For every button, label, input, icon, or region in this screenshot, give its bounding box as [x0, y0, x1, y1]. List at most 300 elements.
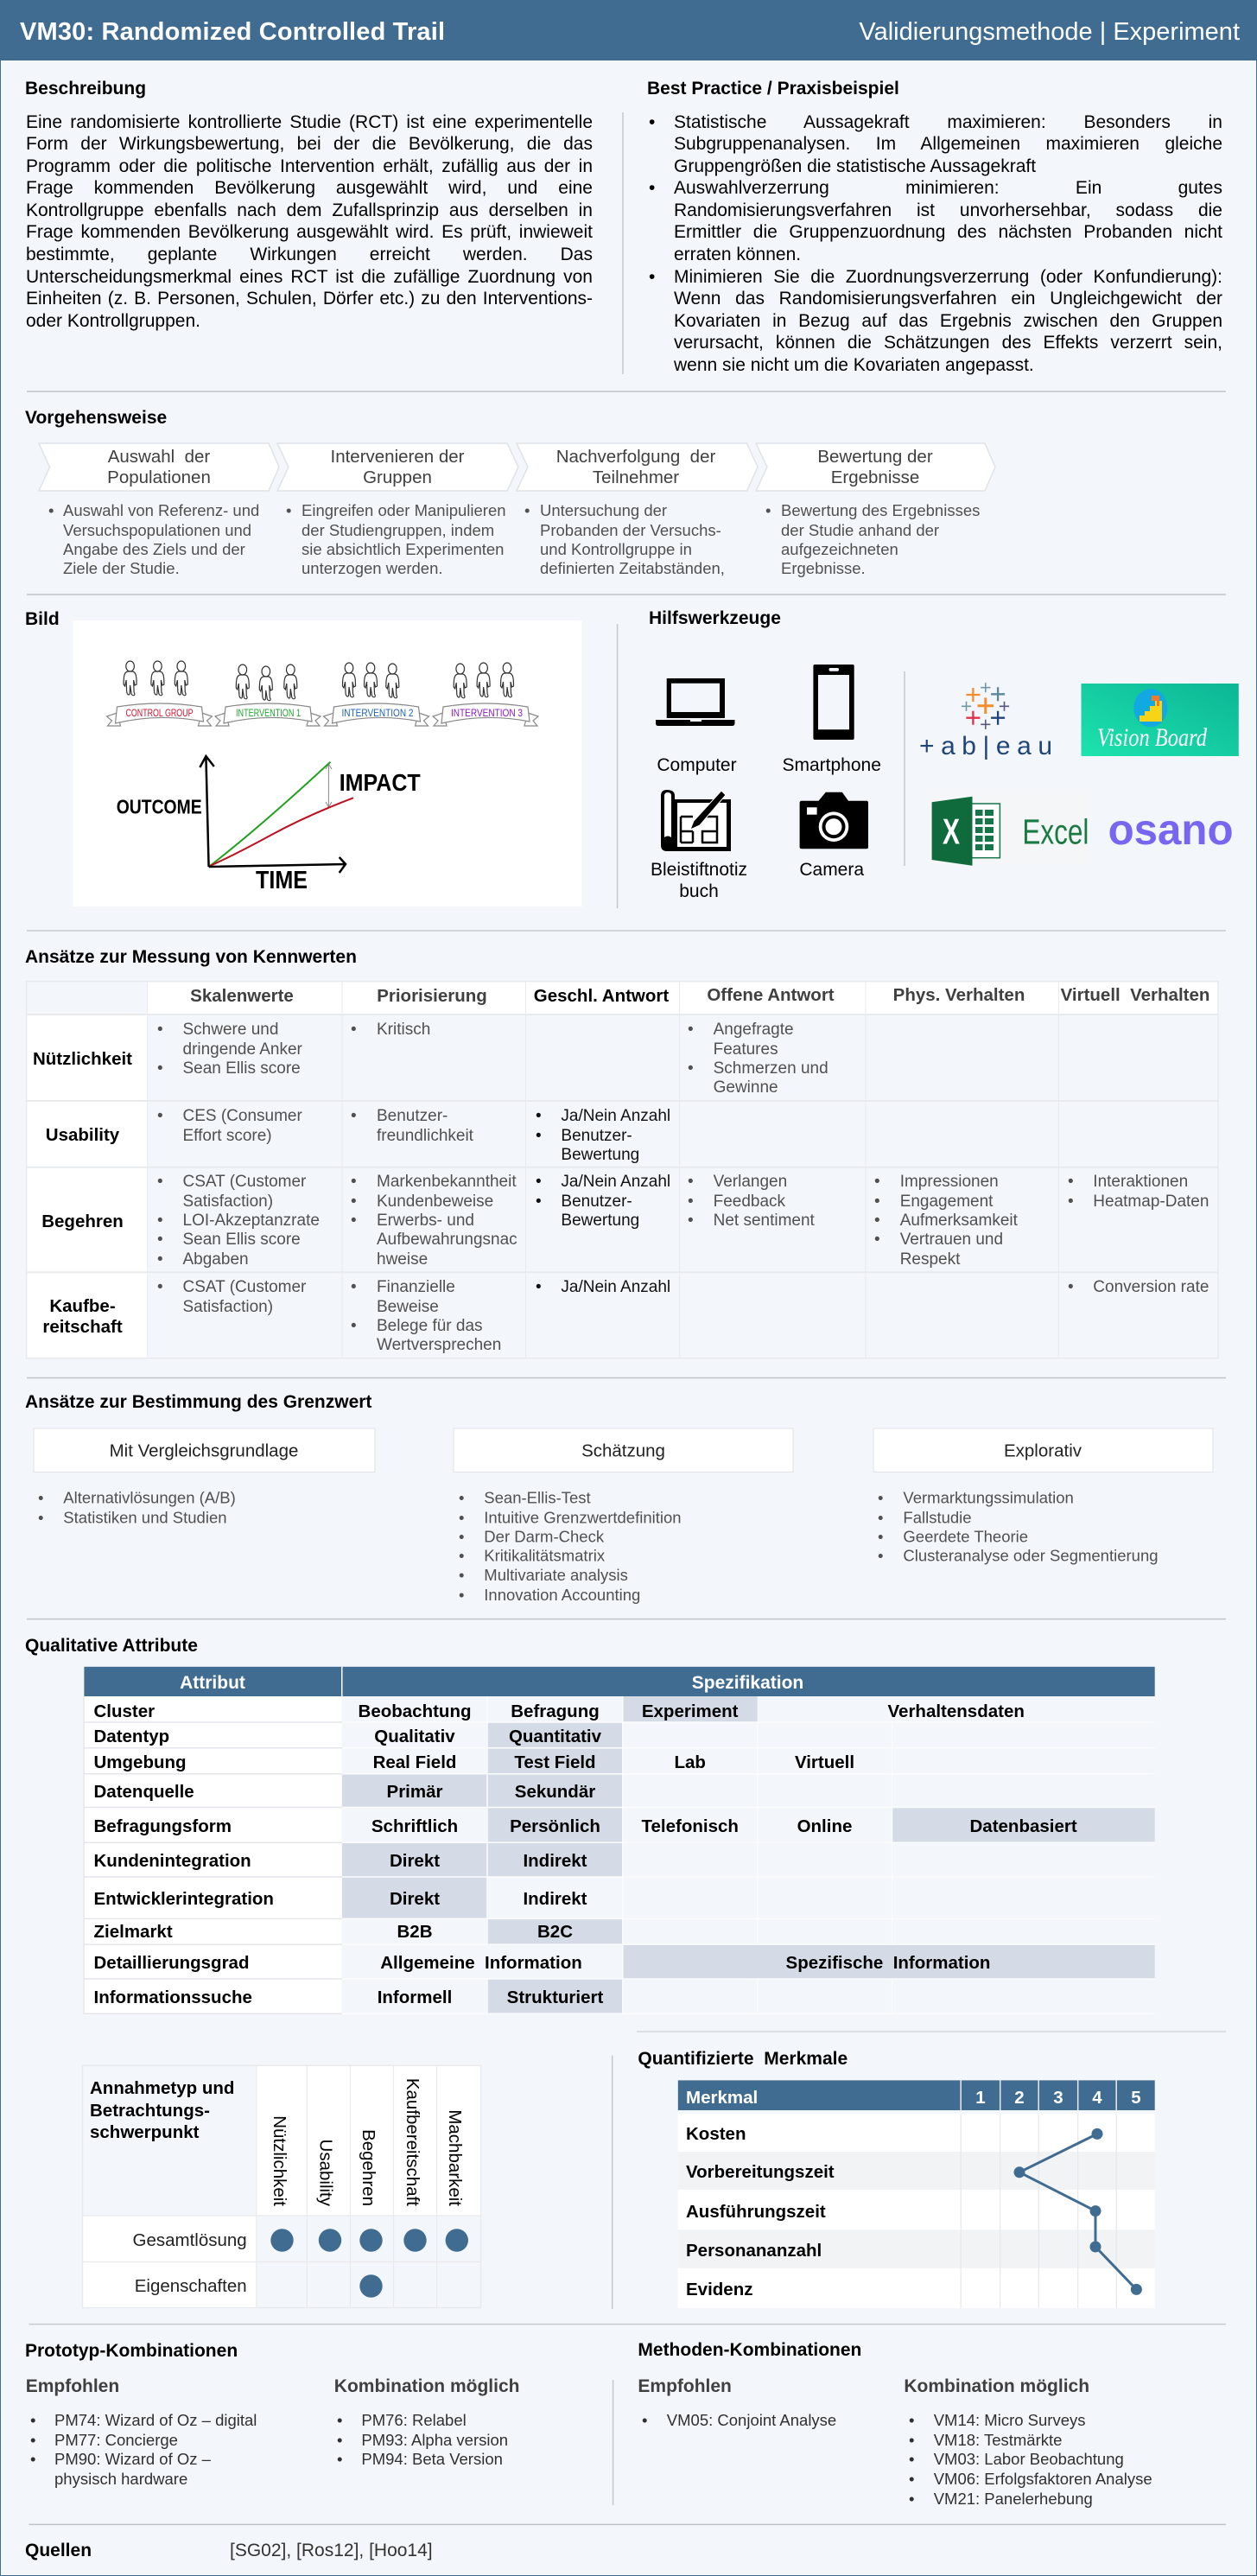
text block: description: Eine randomisierte kontrollierte Studie (RCT) ist eine experimentelle — [26, 112, 593, 131]
step 1 text — [48, 501, 259, 577]
step 3: Teilnehmer — [593, 467, 679, 487]
row: Nützlichkeit: Gewinne — [714, 1078, 778, 1097]
row: Begehren: Ja/Nein Anzahl — [561, 1173, 670, 1191]
row: Nützlichkeit: Angefragte — [714, 1021, 794, 1039]
step 4 text: aufgezeichneten — [781, 540, 898, 558]
panel: Methoden-Kombinationen: • — [909, 2470, 914, 2488]
rotated column labels: Kaufbereitschaft — [403, 2078, 422, 2206]
specification cells: Sekundär — [515, 1782, 595, 1802]
step 3 text: Untersuchung der — [540, 501, 667, 519]
text block: best practice bullets: Randomisierungsverfahren ist unvorhersehbar, sodass die — [674, 200, 1222, 220]
text block: best practice bullets: Kovariaten in Bezug auf das Ergebnis zwischen den Gruppen — [674, 311, 1222, 331]
category label: Validierungsmethode | Experiment — [859, 18, 1240, 46]
row: Usability: Benutzer- — [377, 1107, 448, 1125]
table header: Spezifikation — [692, 1673, 803, 1693]
row: Nützlichkeit: Schmerzen und — [714, 1059, 828, 1078]
row: Kaufbereitschaft: Belege für das — [377, 1317, 483, 1335]
label column: Datenquelle — [93, 1782, 194, 1802]
panel: Methoden-Kombinationen: VM14: Micro Surveys — [934, 2411, 1085, 2429]
step 4 text: Bewertung des Ergebnisses — [781, 501, 980, 519]
step 4 text: der Studie anhand der — [781, 521, 939, 539]
step 4 text: Ergebnisse. — [781, 559, 866, 577]
text block: best practice bullets: Subgruppenanalysen. Im Allgemeinen maximieren gleiche — [674, 134, 1222, 154]
threshold column: Schätzung: Sean-Ellis-Test — [484, 1488, 591, 1507]
text block: best practice bullets: verursacht, können die Schätzungen des Effekts verzerrt sein, — [674, 333, 1222, 353]
text block: description: Kontrollgruppe ebenfalls nach dem Zufallsprinzip aus derselben in — [26, 200, 593, 220]
text block: best practice bullets: Statistische Aussagekraft maximieren: Besonders in — [674, 112, 1222, 131]
text block: best practice bullets: Auswahlverzerrung minimieren: Ein gutes — [674, 178, 1222, 198]
label column: Zielmarkt — [93, 1922, 173, 1942]
logos — [919, 683, 1239, 866]
impact chart — [117, 756, 421, 894]
heading: Best Practice: Best Practice / Praxisbeispiel — [647, 79, 899, 99]
specification cells: Strukturiert — [507, 1988, 603, 2007]
step 1 text: Versuchspopulationen und — [63, 521, 251, 539]
icon: camera — [799, 792, 868, 880]
row: Nützlichkeit: Features — [714, 1040, 778, 1059]
process chevrons — [39, 443, 995, 491]
step 3: Nachverfolgung der — [556, 447, 715, 467]
panel: Methoden-Kombinationen: VM06: Erfolgsfaktoren Analyse — [934, 2470, 1152, 2488]
metrics table — [27, 982, 1218, 1358]
row: Begehren: Net sentiment — [714, 1212, 816, 1230]
step 2 text: sie absichtlich Experimenten — [302, 540, 504, 558]
threshold column: Mit Vergleichsgrundlage: • — [38, 1509, 43, 1526]
text block: best practice bullets — [649, 112, 1222, 375]
row: Begehren: • — [874, 1173, 880, 1191]
row: Eigenschaften: Eigenschaften — [135, 2276, 247, 2296]
step 1: Populationen — [107, 467, 211, 487]
panel: Methoden-Kombinationen: • — [909, 2490, 914, 2508]
chart header: 1 — [975, 2088, 986, 2108]
label column: Kundenintegration — [93, 1851, 251, 1871]
specification cells: Virtuell — [795, 1752, 854, 1772]
panel: Prototyp-Kombinationen — [25, 2341, 519, 2488]
threshold column: Explorativ: Explorativ — [1004, 1441, 1082, 1460]
row: Begehren: • — [157, 1173, 163, 1191]
text block: description: Frage kommenden Bevölkerung ausgewählt wird, und eine — [26, 178, 593, 198]
threshold column: Schätzung: • — [459, 1547, 464, 1564]
matrix title: schwerpunkt — [90, 2122, 200, 2142]
step 1 text: Auswahl von Referenz- und — [63, 501, 259, 519]
icon: pencil notebook — [651, 790, 747, 901]
row: Begehren: Begehren — [41, 1212, 124, 1231]
step 1 — [39, 443, 279, 491]
specification cells: B2C — [537, 1922, 573, 1942]
header band — [0, 0, 1257, 60]
specification cells: Direkt — [390, 1889, 440, 1909]
specification cells: Informell — [378, 1988, 452, 2007]
panel: Methoden-Kombinationen: VM03: Labor Beobachtung — [934, 2450, 1124, 2468]
table header row: Geschl. Antwort — [534, 986, 669, 1006]
panel: Prototyp-Kombinationen: • — [337, 2450, 342, 2468]
row labels: Kosten — [686, 2124, 746, 2144]
table header row — [190, 985, 1209, 1006]
text block: description: Frage kommenden Bevölkerung ausgewählt wird. Es prüft, inwieweit — [26, 222, 593, 242]
threshold column: Mit Vergleichsgrundlage: Mit Vergleichsgrundlage — [110, 1441, 298, 1460]
specification cells: Online — [797, 1816, 852, 1836]
specification cells: Indirekt — [523, 1889, 587, 1909]
logo: tableau — [919, 683, 1052, 760]
text block: best practice bullets: • — [649, 112, 655, 131]
row: Begehren: Abgaben — [183, 1250, 249, 1269]
row: Begehren: hweise — [377, 1250, 428, 1269]
threshold column: Explorativ: Clusteranalyse oder Segmentierung — [903, 1547, 1159, 1564]
row: Nützlichkeit: Schwere und — [183, 1021, 278, 1039]
step 4: Ergebnisse — [831, 467, 919, 487]
row: Begehren: • — [688, 1212, 694, 1230]
row: Begehren: Interaktionen — [1093, 1173, 1188, 1191]
chart header: 3 — [1053, 2088, 1063, 2108]
row: Kaufbereitschaft: Kaufbe- — [49, 1296, 116, 1316]
label column: Cluster — [93, 1701, 155, 1721]
heading: Ansätze zur Bestimmung des Grenzwert: Ansätze zur Bestimmung des Grenzwert — [25, 1392, 371, 1412]
specification cells: Beobachtung — [359, 1701, 471, 1721]
row: Nützlichkeit: • — [688, 1059, 694, 1078]
row: Kaufbereitschaft: • — [351, 1317, 357, 1335]
sources — [25, 2541, 433, 2560]
row: Usability: • — [157, 1107, 163, 1125]
row: Gesamtlösung — [133, 2229, 468, 2252]
row: Begehren: • — [874, 1231, 880, 1249]
step 4: Bewertung der — [817, 447, 933, 467]
row: Begehren: Impressionen — [900, 1173, 999, 1191]
row: Begehren: Engagement — [900, 1193, 994, 1211]
heading: Ansätze zur Messung von Kennwerten: Ansätze zur Messung von Kennwerten — [25, 947, 357, 967]
row: Nützlichkeit: Sean Ellis score — [183, 1059, 301, 1078]
matrix title: Betrachtungs- — [90, 2101, 210, 2121]
threshold column: Schätzung: Multivariate analysis — [484, 1566, 628, 1584]
threshold column: Schätzung: • — [459, 1488, 464, 1507]
row labels: Ausführungszeit — [686, 2202, 826, 2222]
threshold column: Explorativ: • — [878, 1547, 883, 1564]
threshold column: Mit Vergleichsgrundlage: Alternativlösungen (A/B) — [63, 1488, 236, 1507]
row: Kaufbereitschaft: Finanzielle — [377, 1278, 455, 1296]
specification cells: Telefonisch — [642, 1816, 739, 1836]
threshold column: Explorativ: Fallstudie — [903, 1509, 972, 1526]
row: Begehren: CSAT (Customer — [183, 1173, 307, 1191]
panel: Prototyp-Kombinationen: PM93: Alpha version — [361, 2431, 508, 2449]
label column: Datentyp — [93, 1727, 169, 1746]
threshold column: Explorativ: • — [878, 1509, 883, 1526]
step 2 — [277, 443, 518, 491]
text block: description — [26, 112, 593, 331]
specification cells: Allgemeine Information — [380, 1953, 582, 1973]
row: Begehren: Verlangen — [714, 1173, 787, 1191]
step 3 text: definierten Zeitabständen, — [540, 559, 725, 577]
threshold column: Mit Vergleichsgrundlage — [34, 1428, 375, 1526]
chart header: 4 — [1092, 2088, 1102, 2108]
panel: Prototyp-Kombinationen: Empfohlen — [26, 2376, 119, 2396]
specification cells: Direkt — [390, 1851, 440, 1871]
logo: excel — [927, 789, 1089, 866]
step 1 text: • — [48, 501, 54, 519]
step descriptions — [48, 501, 980, 577]
panel: Prototyp-Kombinationen: PM94: Beta Version — [361, 2450, 503, 2468]
text block: description: Programm oder die politische Intervention erhält, zufällig aus der in — [26, 156, 593, 176]
row: Usability: • — [351, 1107, 357, 1125]
row labels — [686, 2124, 835, 2299]
label column: Umgebung — [93, 1752, 187, 1772]
row: Usability: Bewertung — [561, 1146, 639, 1164]
row: Nützlichkeit: • — [351, 1021, 357, 1039]
threshold column: Explorativ: • — [878, 1528, 883, 1545]
row: Begehren: Erwerbs- und — [377, 1212, 474, 1230]
step 4 text — [765, 501, 980, 577]
threshold column: Mit Vergleichsgrundlage: • — [38, 1488, 43, 1507]
row: Kaufbereitschaft: reitschaft — [42, 1317, 123, 1337]
row: Begehren: Benutzer- — [561, 1193, 632, 1211]
rotated column labels: Usability — [316, 2140, 335, 2207]
panel: Methoden-Kombinationen: VM21: Panelerhebung — [934, 2490, 1093, 2508]
row: Usability — [46, 1107, 670, 1164]
row: Nützlichkeit: Nützlichkeit — [33, 1049, 132, 1069]
text block: best practice bullets: Minimieren Sie die Zuordnungsverzerrung (oder Konfundierung): — [674, 267, 1222, 287]
row: Begehren: Aufbewahrungsnac — [377, 1231, 517, 1249]
row: Usability: Ja/Nein Anzahl — [561, 1107, 670, 1125]
table header row: Offene Antwort — [707, 985, 835, 1005]
threshold column: Schätzung: Innovation Accounting — [484, 1586, 640, 1604]
threshold column: Schätzung: Intuitive Grenzwertdefinition — [484, 1509, 682, 1526]
specification cells: Quantitativ — [509, 1727, 602, 1746]
panel: Prototyp-Kombinationen: Kombination möglich — [334, 2376, 519, 2396]
threshold column: Schätzung: • — [459, 1509, 464, 1526]
row: Begehren: Respekt — [900, 1250, 961, 1269]
row: Begehren: • — [157, 1250, 163, 1269]
table header — [84, 1667, 1155, 1696]
icon: laptop computer — [656, 678, 737, 775]
step 1 text: Ziele der Studie. — [63, 559, 180, 577]
row labels: Personananzahl — [686, 2241, 822, 2261]
threshold column: Schätzung: • — [459, 1528, 464, 1545]
specification cells: Indirekt — [523, 1851, 587, 1871]
row: Usability: Usability — [46, 1125, 120, 1145]
step 2 text: unterzogen werden. — [302, 559, 443, 577]
chart header: 5 — [1131, 2088, 1141, 2108]
table header row: Virtuell Verhalten — [1061, 985, 1209, 1005]
step 2: Gruppen — [363, 467, 432, 487]
panel: Prototyp-Kombinationen: • — [337, 2431, 342, 2449]
banners: INTERVENTION 2 — [342, 709, 413, 719]
step 2 text: • — [286, 501, 291, 519]
step 3 text: und Kontrollgruppe in — [540, 540, 692, 558]
banners — [107, 703, 538, 726]
threshold column: Explorativ — [873, 1428, 1213, 1564]
row: Usability: • — [536, 1107, 542, 1125]
logo: excel: Excel — [1022, 812, 1089, 852]
banners: INTERVENTION 1 — [236, 709, 301, 719]
row: Kaufbereitschaft: • — [1068, 1278, 1074, 1296]
text block: description: Einheiten (z. B. Personen, Schulen, Dörfer etc.) zu den Interventions- — [26, 289, 593, 308]
specification cells: Experiment — [642, 1701, 739, 1721]
specification cells: Schriftlich — [371, 1816, 458, 1836]
assumption type matrix — [83, 2065, 480, 2307]
row: Usability: freundlichkeit — [377, 1127, 474, 1145]
table header row: Phys. Verhalten — [893, 985, 1025, 1005]
row: Begehren: Sean Ellis score — [183, 1231, 301, 1249]
row: Kaufbereitschaft: Ja/Nein Anzahl — [561, 1278, 670, 1296]
specification cells: Real Field — [373, 1752, 456, 1772]
panel: Prototyp-Kombinationen: • — [337, 2411, 342, 2429]
text block: description: Unterscheidungsmerkmal eines RCT ist die zufällige Zuordnung von — [26, 267, 593, 287]
panel: Prototyp-Kombinationen: PM74: Wizard of Oz – digital — [54, 2411, 257, 2429]
step 2 text — [286, 501, 506, 577]
matrix title: Annahmetyp und — [90, 2078, 234, 2098]
row: Nützlichkeit: • — [157, 1021, 163, 1039]
panel: Prototyp-Kombinationen: Prototyp-Kombinationen — [25, 2341, 238, 2361]
tool icons — [651, 665, 881, 901]
matrix title — [90, 2078, 234, 2142]
row: Begehren: • — [157, 1212, 163, 1230]
panel: Methoden-Kombinationen: VM05: Conjoint Analyse — [667, 2411, 836, 2429]
title: VM30: Randomized Controlled Trail — [20, 18, 445, 46]
heading: Hilfswerkzeuge: Hilfswerkzeuge — [649, 608, 781, 628]
panel: Prototyp-Kombinationen: PM76: Relabel — [361, 2411, 467, 2429]
banners: CONTROL GROUP — [126, 709, 194, 719]
row: Usability: Effort score) — [183, 1127, 272, 1145]
impact chart: IMPACT — [340, 769, 421, 796]
row: Kaufbereitschaft: Satisfaction) — [183, 1298, 273, 1316]
row labels: Vorbereitungszeit — [686, 2162, 835, 2182]
row: Begehren: • — [351, 1173, 357, 1191]
row: Nützlichkeit — [33, 1021, 828, 1097]
sources: Quellen — [25, 2541, 92, 2560]
people groups — [124, 661, 513, 701]
step 2: Intervenieren der — [331, 447, 465, 467]
row: Nützlichkeit: Kritisch — [377, 1021, 430, 1039]
threshold column: Explorativ: • — [878, 1488, 883, 1507]
text block: best practice bullets: • — [649, 267, 655, 287]
specification cells: B2B — [397, 1922, 433, 1942]
row: Begehren: Vertrauen und — [900, 1231, 1003, 1249]
heading: Quantifizierte Merkmale: Quantifizierte Merkmale — [638, 2049, 848, 2069]
chart header: Merkmal — [686, 2088, 758, 2108]
specification cells: Datenbasiert — [970, 1816, 1077, 1836]
specification cells — [342, 1696, 1155, 2014]
table header row: Priorisierung — [377, 986, 487, 1006]
panel: Methoden-Kombinationen: • — [909, 2431, 914, 2449]
text block: best practice bullets: • — [649, 178, 655, 198]
step 1 text: Angabe des Ziels und der — [63, 540, 245, 558]
logo: tableau: +ab|eau — [919, 732, 1052, 760]
threshold column: Schätzung: Kritikalitätsmatrix — [484, 1547, 606, 1564]
heading: Vorgehensweise: Vorgehensweise — [25, 408, 167, 428]
rotated column labels: Nützlichkeit — [270, 2115, 289, 2206]
sources: [SG02], [Ros12], [Hoo14] — [230, 2541, 433, 2560]
label column: Detaillierungsgrad — [93, 1953, 249, 1973]
heading: Bild: Bild — [25, 609, 60, 629]
row: Begehren: • — [874, 1212, 880, 1230]
row: Begehren: • — [351, 1193, 357, 1211]
row: Kaufbereitschaft: Beweise — [377, 1298, 439, 1316]
threshold column: Schätzung: Der Darm-Check — [484, 1528, 605, 1545]
qualitative attributes table — [84, 1667, 1155, 2014]
row: Kaufbereitschaft: CSAT (Customer — [183, 1278, 307, 1296]
row: Nützlichkeit: • — [157, 1059, 163, 1078]
panel: Methoden-Kombinationen: • — [642, 2411, 647, 2429]
specification cells: Persönlich — [510, 1816, 600, 1836]
row: Begehren: LOI-Akzeptanzrate — [183, 1212, 320, 1230]
step 3 — [517, 443, 758, 491]
panel: Prototyp-Kombinationen: PM90: Wizard of Oz – — [54, 2450, 212, 2468]
step 2 text: der Studiengruppen, indem — [302, 521, 494, 539]
panel: Methoden-Kombinationen: • — [909, 2411, 914, 2429]
logo: vision board — [1082, 684, 1239, 756]
row: Begehren: • — [1068, 1173, 1074, 1191]
text block: best practice bullets: wenn sie nicht um die Kovariaten angepasst. — [674, 355, 1034, 375]
label column: Befragungsform — [93, 1816, 232, 1836]
row: Begehren: Markenbekanntheit — [377, 1173, 517, 1191]
chart header — [678, 2080, 1155, 2110]
quantified features chart — [678, 2080, 1155, 2308]
row: Begehren: Kundenbeweise — [377, 1193, 493, 1211]
icon: pencil notebook: buch — [679, 881, 719, 901]
row: Begehren: • — [688, 1173, 694, 1191]
text block: description: bestimmte, geplante Wirkungen erreicht werden. Das — [26, 245, 593, 264]
rotated column labels: Machbarkeit — [445, 2109, 465, 2206]
label column — [84, 1696, 342, 2014]
threshold column: Explorativ: Geerdete Theorie — [903, 1528, 1028, 1545]
icon: smartphone — [782, 665, 881, 775]
RCT illustration — [73, 620, 582, 906]
text block: best practice bullets: Gruppengrößen die statistische Aussagekraft — [674, 156, 1036, 176]
specification cells: Befragung — [511, 1701, 600, 1721]
step 1: Auswahl der — [108, 447, 210, 467]
row: Kaufbereitschaft: Conversion rate — [1093, 1278, 1209, 1296]
text block: best practice bullets: Ermittler die Gruppenzuordnung des nächsten Probanden nicht — [674, 222, 1222, 242]
rotated column labels: Begehren — [359, 2129, 378, 2206]
threshold column: Mit Vergleichsgrundlage: Statistiken und Studien — [63, 1509, 227, 1526]
threshold column: Schätzung: Schätzung — [581, 1441, 665, 1460]
logo: osano: osano — [1108, 805, 1234, 854]
row: Usability: • — [536, 1127, 542, 1145]
panel: Prototyp-Kombinationen: • — [30, 2450, 35, 2468]
row: Begehren — [41, 1173, 1209, 1269]
icon: smartphone: Smartphone — [782, 755, 881, 775]
row: Begehren: • — [1068, 1193, 1074, 1211]
logo: excel: X — [943, 811, 960, 852]
specification cells: Spezifische Information — [786, 1953, 990, 1973]
specification cells: Qualitativ — [374, 1727, 455, 1746]
row: Eigenschaften — [135, 2274, 383, 2298]
row: Usability: CES (Consumer — [183, 1107, 302, 1125]
profile line — [1014, 2128, 1142, 2295]
panel: Prototyp-Kombinationen: physisch hardware — [54, 2470, 187, 2488]
row: Begehren: Bewertung — [561, 1212, 639, 1230]
row: Nützlichkeit: dringende Anker — [183, 1040, 303, 1059]
chart header: 2 — [1014, 2088, 1025, 2108]
icon: pencil notebook: Bleistiftnotiz — [651, 860, 747, 880]
row: Kaufbereitschaft: • — [536, 1278, 542, 1296]
heading: Beschreibung: Beschreibung — [25, 79, 146, 99]
row: Nützlichkeit: • — [688, 1021, 694, 1039]
label column: Informationssuche — [93, 1988, 252, 2007]
step 3 text: • — [524, 501, 530, 519]
table header row: Skalenwerte — [190, 986, 294, 1006]
text block: best practice bullets: erraten können. — [674, 245, 801, 264]
panel: Prototyp-Kombinationen: • — [30, 2431, 35, 2449]
label column: Entwicklerintegration — [93, 1889, 274, 1909]
row: Begehren: Satisfaction) — [183, 1193, 273, 1211]
heading: Qualitative Attribute: Qualitative Attribute — [25, 1636, 198, 1656]
row: Begehren: • — [157, 1231, 163, 1249]
text block: best practice bullets: Wenn das Randomisierungsverfahren ein Ungleichgewicht der — [674, 289, 1222, 308]
row: Begehren: Feedback — [714, 1193, 786, 1211]
impact chart: OUTCOME — [117, 796, 202, 818]
specification cells: Verhaltensdaten — [888, 1701, 1025, 1721]
threshold column: Explorativ: Vermarktungssimulation — [903, 1488, 1074, 1507]
panel: Methoden-Kombinationen: Empfohlen — [638, 2376, 732, 2396]
